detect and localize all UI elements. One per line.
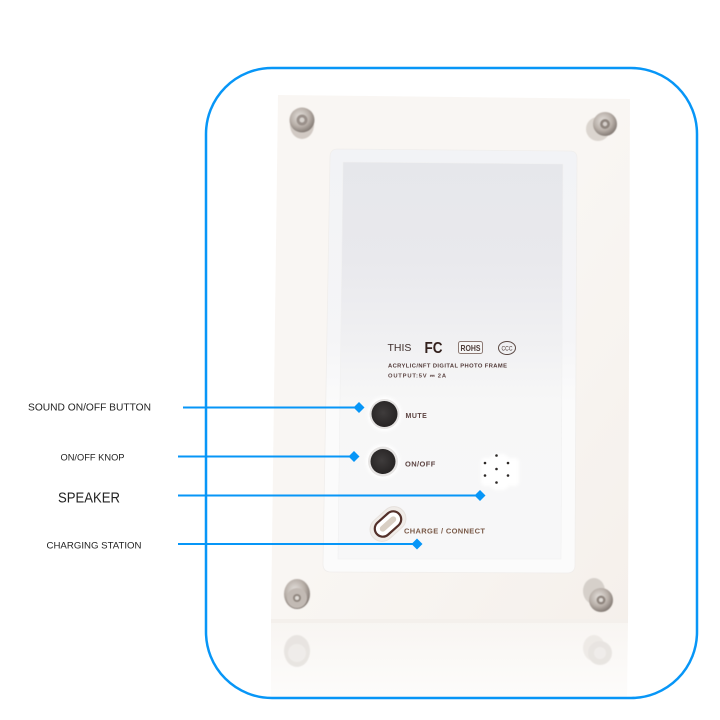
screw: top right <box>586 112 617 141</box>
charge label: CHARGE / CONNECT <box>404 526 485 536</box>
on/off button <box>366 444 400 478</box>
output rating: OUTPUT:5V ⎓ 2A <box>388 374 447 380</box>
certification row <box>388 340 516 357</box>
mute label: MUTE <box>406 413 427 420</box>
screw: bottom right <box>583 578 613 612</box>
FC mark: FC <box>424 340 442 357</box>
label: SOUND ON/OFF BUTTON <box>28 402 151 414</box>
label: SPEAKER <box>58 490 120 506</box>
screw: bottom left <box>284 579 310 609</box>
leader line <box>178 456 353 458</box>
callout: charging station <box>46 538 422 552</box>
brand text: THIS <box>388 342 411 354</box>
CCC mark: CCC <box>502 346 513 352</box>
back panel <box>323 149 577 573</box>
inner label area <box>338 162 563 559</box>
callout: sound on/off button <box>28 402 364 414</box>
product description: ACRYLIC/NFT DIGITAL PHOTO FRAME <box>388 364 507 370</box>
screw reflections <box>284 635 612 667</box>
callout: on/off knop <box>60 451 360 464</box>
leader line <box>178 543 416 545</box>
speaker grille <box>481 454 519 490</box>
callout: speaker <box>58 490 486 506</box>
on/off label: ON/OFF <box>405 460 436 468</box>
blue rounded border <box>206 68 697 698</box>
photo frame product <box>271 95 630 697</box>
label: ON/OFF KNOP <box>60 452 124 464</box>
charging port <box>365 502 411 546</box>
label: CHARGING STATION <box>46 540 142 552</box>
leader line <box>178 494 479 496</box>
acrylic plate <box>271 95 630 620</box>
mute button <box>368 397 402 431</box>
leader line <box>183 406 358 408</box>
screw: top left <box>290 108 314 139</box>
acrylic reflection <box>271 620 628 697</box>
ROHS mark: ROHS <box>460 343 481 353</box>
